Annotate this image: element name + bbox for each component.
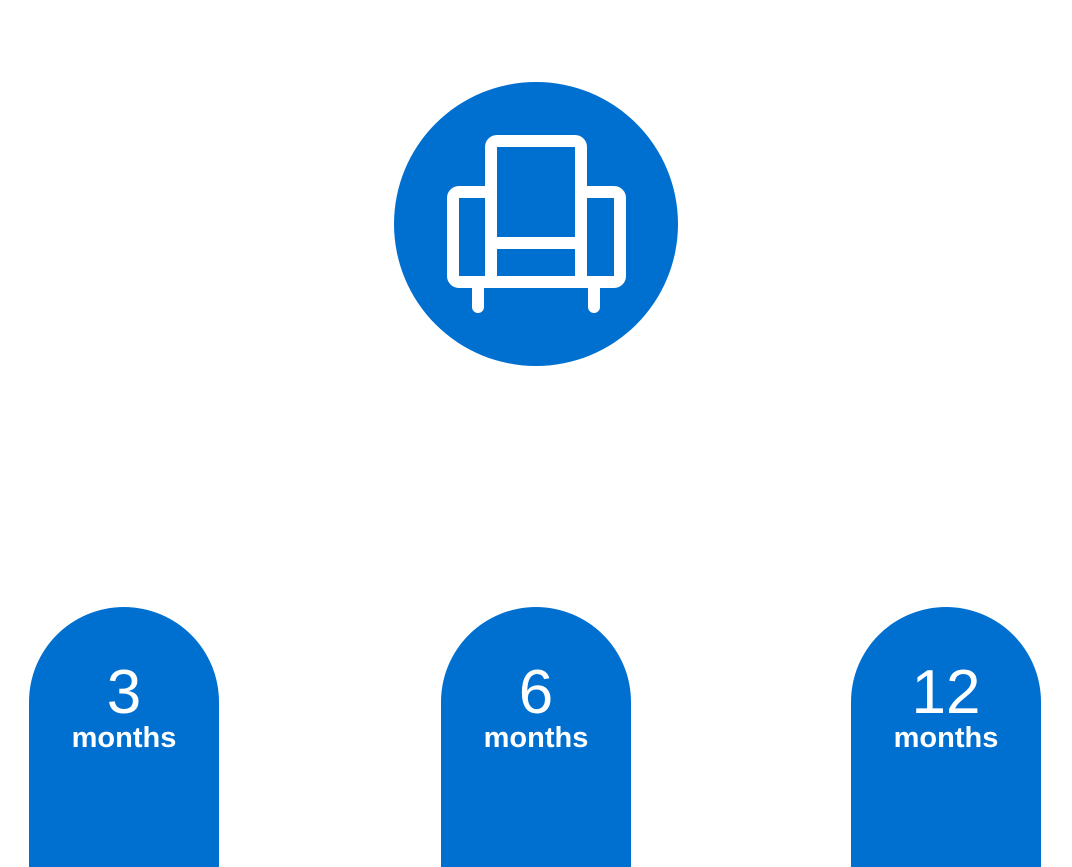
icon: armchair in blue circle (394, 82, 678, 366)
pill: 6 months: 6 (519, 658, 553, 727)
pill: 3 months: months (72, 722, 176, 754)
pill: 12 months: months (894, 722, 998, 754)
pill: 6 months: months (484, 722, 588, 754)
pill: 6 months (441, 607, 631, 867)
pill: 3 months: 3 (107, 658, 141, 727)
pill: 3 months (29, 607, 219, 867)
pill: 12 months (851, 607, 1041, 867)
pill: 12 months: 12 (912, 658, 980, 727)
